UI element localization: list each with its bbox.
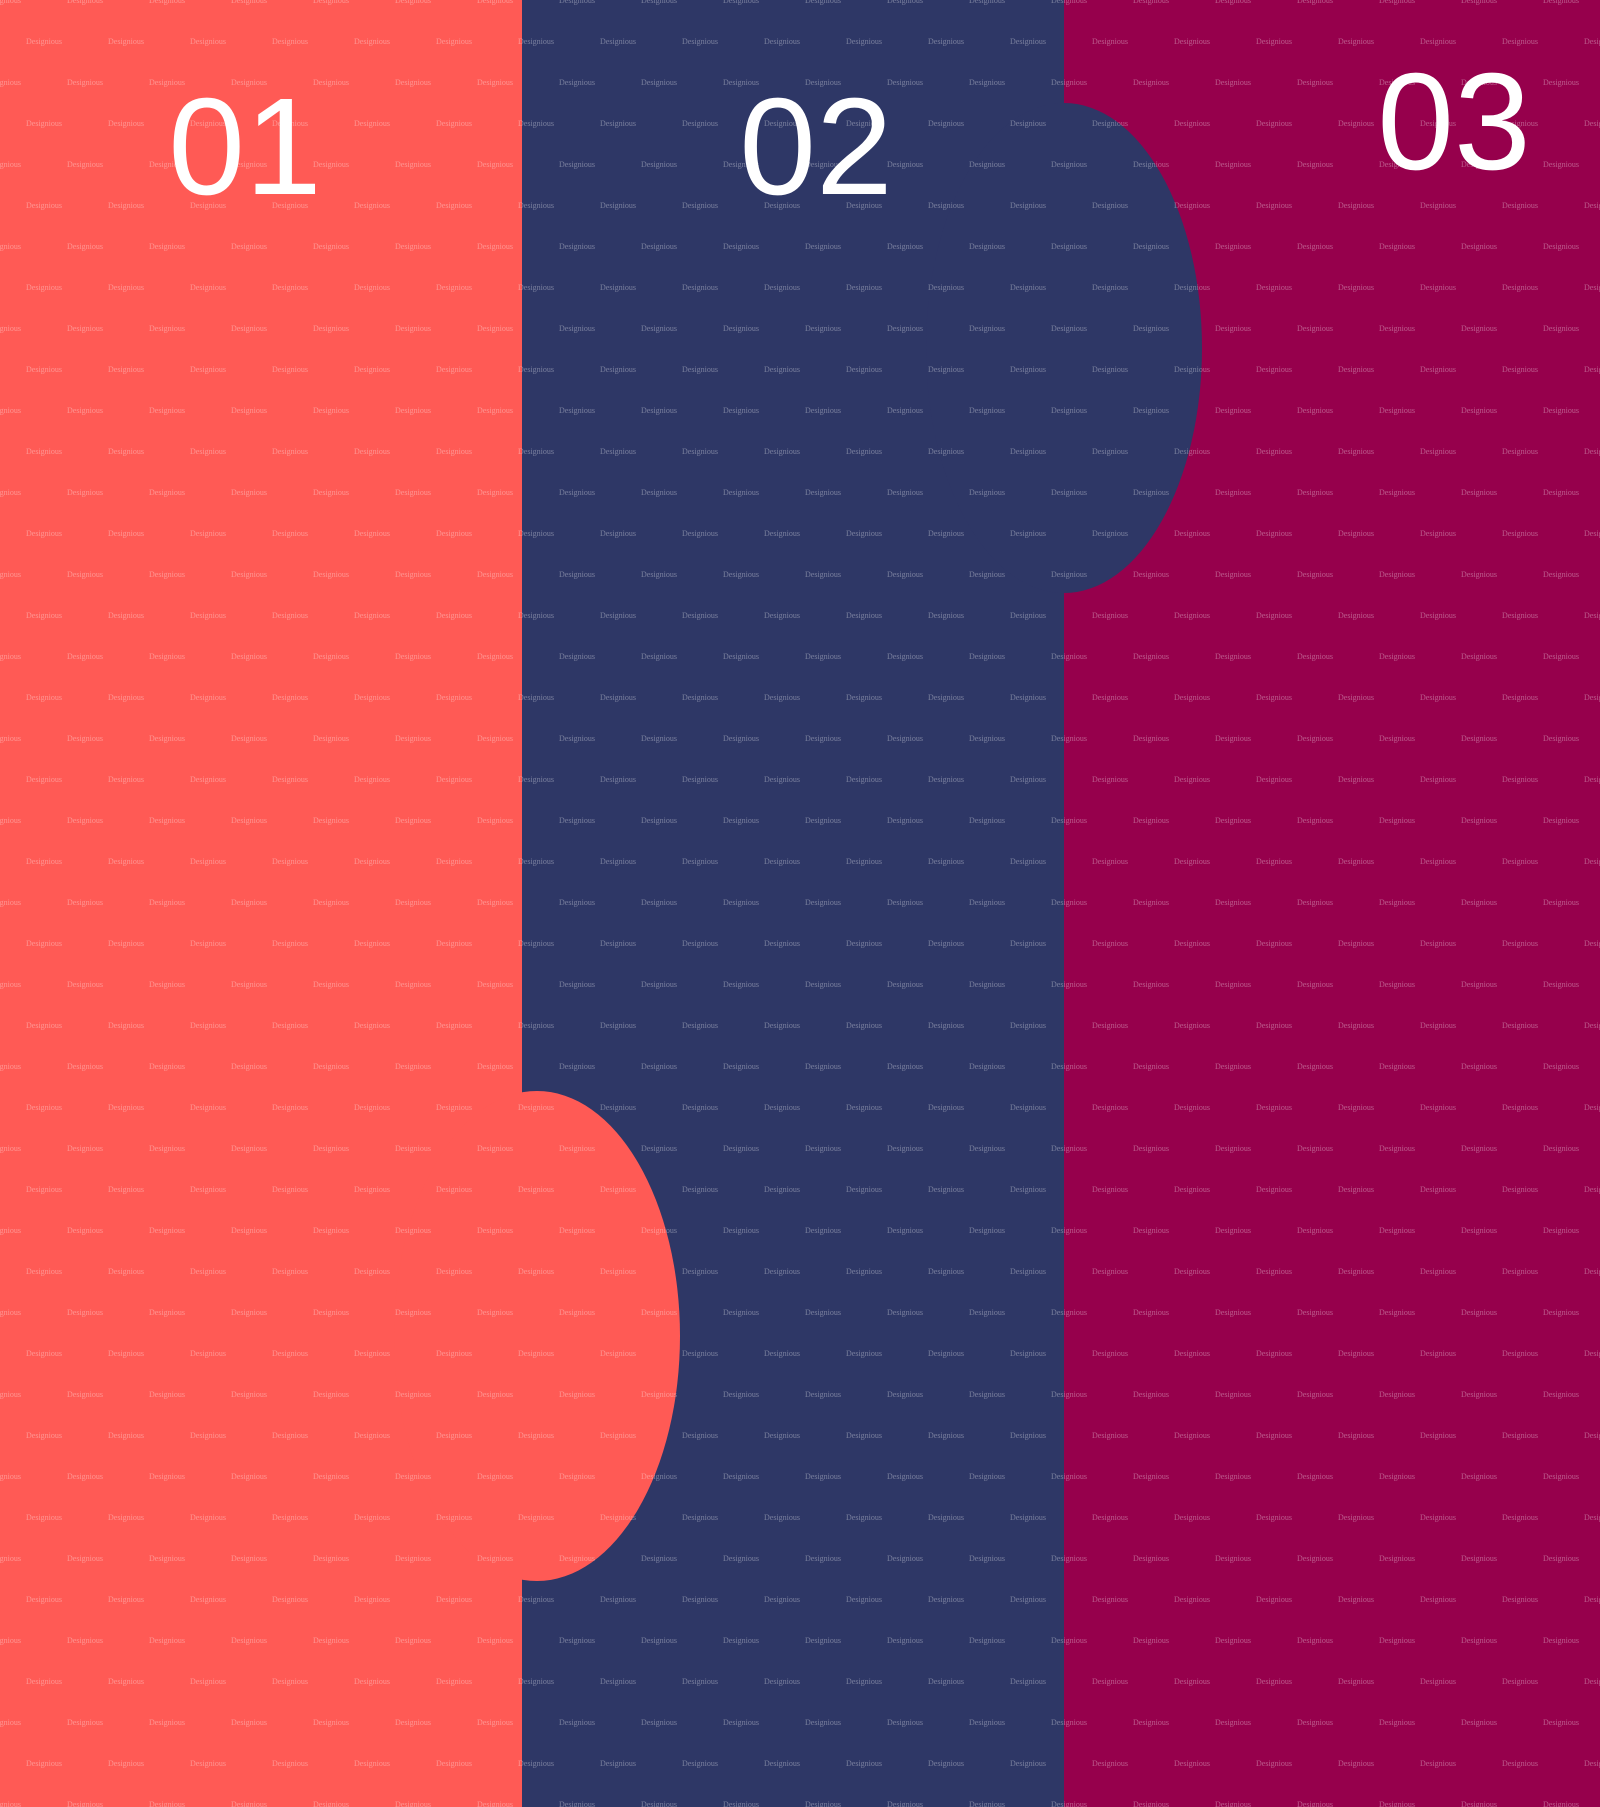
number 02: 02 — [739, 70, 893, 224]
panel: column 03 — [1064, 0, 1600, 1807]
number 01: 01 — [168, 70, 322, 224]
panel: column 01 — [0, 0, 680, 1807]
panel: column 02 — [522, 0, 1202, 1807]
number 03: 03 — [1377, 45, 1531, 199]
